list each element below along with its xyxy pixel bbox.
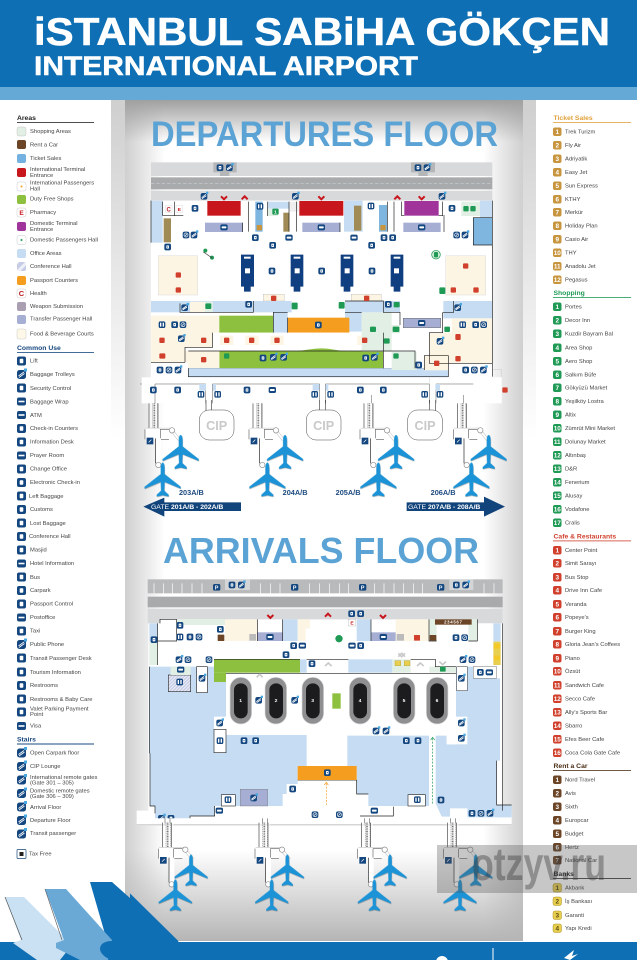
panel: list cafe and restaurants: Gloria Jean's Coffees bbox=[565, 642, 620, 648]
map: departures floor bbox=[140, 162, 508, 403]
panel: list banks: 4 bbox=[555, 926, 559, 933]
panel: list ticket sales: Sun Express bbox=[565, 184, 598, 190]
panel: list shopping: 11 bbox=[554, 439, 561, 446]
panel: list cafe and restaurants: Ally's Sports Bar bbox=[565, 710, 607, 716]
panel: list cafe and restaurants: 2 bbox=[555, 561, 559, 568]
bottom corner wedge bbox=[130, 893, 178, 943]
panel: list cafe and restaurants: Veranda bbox=[565, 602, 587, 608]
panel: list ticket sales: Easy Jet bbox=[565, 170, 588, 176]
panel: legend stairs: Open Carpark floor bbox=[30, 750, 79, 756]
panel: list cafe and restaurants: 9 bbox=[555, 656, 559, 663]
baggage carousels: 6 bbox=[436, 698, 439, 704]
panel: legend common use: Public Phone bbox=[30, 642, 64, 648]
panel: legend areas: Conference Hall bbox=[30, 264, 72, 270]
panel: legend common use bbox=[17, 345, 94, 730]
panel: legend common use: Bus bbox=[30, 575, 40, 581]
panel: list ticket sales: Fly Air bbox=[565, 143, 581, 149]
panel: list cafe and restaurants: 6 bbox=[555, 615, 559, 622]
panel: list shopping: 8 bbox=[555, 399, 559, 406]
panel: list shopping: 2 bbox=[555, 318, 559, 325]
baggage carousels: 3 bbox=[311, 698, 314, 704]
heading: departures floor: DEPARTURES FLOOR bbox=[151, 115, 498, 154]
panel: list shopping bbox=[553, 290, 631, 527]
panel: legend common use: Lost Baggage bbox=[30, 521, 66, 527]
panel: list shopping: 5 bbox=[555, 359, 559, 366]
panel: legend stairs: Tax Free bbox=[29, 852, 52, 858]
panel: legend common use: Valet Parking Payment bbox=[30, 706, 89, 712]
panel: legend stairs: CIP Lounge bbox=[30, 764, 61, 770]
panel: list rent a car: 6 bbox=[555, 845, 559, 852]
panel: legend stairs: Departure Floor bbox=[30, 818, 71, 824]
panel: list cafe and restaurants: Sbarro bbox=[565, 724, 582, 730]
panel: list ticket sales: Casio Air bbox=[565, 237, 588, 243]
panel: legend common use: Visa bbox=[30, 724, 42, 730]
panel: list ticket sales: 9 bbox=[555, 237, 559, 244]
panel: list banks: 2 bbox=[555, 899, 559, 906]
ticket and shop badges: 1 bbox=[274, 209, 277, 215]
panel: list ticket sales: 12 bbox=[554, 277, 561, 284]
panel: legend stairs: Transit passenger bbox=[30, 831, 76, 837]
panel: list ticket sales: THY bbox=[565, 250, 577, 256]
panel: list banks: Akbank bbox=[565, 886, 584, 892]
panel: list cafe and restaurants: 12 bbox=[554, 696, 561, 703]
panel: legend areas: International Passengers bbox=[30, 180, 94, 186]
panel: legend areas: Entrance bbox=[30, 173, 53, 179]
arrow: gate 207-208: GATE 207A/B - 208A/B bbox=[408, 504, 480, 511]
panel: list ticket sales: Adriyatik bbox=[565, 156, 587, 162]
panel: legend common use: Baggage Wrap bbox=[30, 400, 69, 406]
panel: list shopping: Decor Inn bbox=[565, 318, 590, 324]
panel: list shopping: D&R bbox=[565, 466, 577, 472]
panel: legend stairs: Domestic remote gates bbox=[30, 788, 90, 794]
panel: legend areas: Hall bbox=[30, 186, 40, 192]
panel: list shopping: Shopping bbox=[554, 290, 585, 297]
gate concourse bar bbox=[140, 369, 502, 403]
arrivals badges: E bbox=[350, 621, 354, 627]
airside: arrivals gates bbox=[130, 823, 512, 943]
panel: list ticket sales: Anadolu Jet bbox=[565, 264, 596, 270]
arrow: gate 201-202: GATE 201A/B - 202A/B bbox=[151, 504, 223, 511]
panel: list cafe and restaurants: 5 bbox=[555, 602, 559, 609]
panel: list cafe and restaurants: 10 bbox=[554, 669, 561, 676]
arrival bar shadow bbox=[137, 823, 512, 826]
arrivals road bands bbox=[148, 579, 503, 623]
panel: list cafe and restaurants: 7 bbox=[555, 629, 559, 636]
ticket and shop badges: C bbox=[167, 207, 172, 213]
panel: list shopping: 14 bbox=[554, 480, 561, 487]
panel: list shopping: 7 bbox=[555, 385, 559, 392]
panel: legend areas: Office Areas bbox=[30, 251, 62, 257]
CIP lounges: CIP bbox=[414, 419, 436, 433]
arrow: gate 201-202 bbox=[143, 498, 241, 517]
panel: legend stairs: Stairs bbox=[17, 736, 36, 744]
panel: list ticket sales: Holiday Plan bbox=[565, 224, 598, 230]
panel: legend common use: Common Use bbox=[17, 345, 61, 352]
gate numbers: 205A/B bbox=[336, 488, 361, 497]
panel: list cafe and restaurants: Center Point bbox=[565, 548, 598, 554]
panel: legend common use: Hotel Information bbox=[30, 561, 74, 567]
panel: list cafe and restaurants: Drive Inn Cafe bbox=[565, 588, 602, 594]
panel: legend stairs bbox=[17, 736, 97, 858]
baggage carousels: 1 bbox=[239, 698, 242, 704]
panel: list shopping: Portes bbox=[565, 304, 582, 310]
panel: legend areas: Health bbox=[30, 291, 47, 297]
panel: legend areas: Food & Beverage Courts bbox=[30, 332, 94, 338]
map: arrivals floor bbox=[137, 579, 512, 826]
gate numbers: 206A/B bbox=[431, 488, 456, 497]
panel: list ticket sales: 8 bbox=[555, 223, 559, 230]
panel: legend common use: Masjid bbox=[30, 548, 47, 554]
check-in island glyphs bbox=[244, 257, 400, 273]
footer band with tail fins bbox=[0, 882, 637, 960]
duty free and passport blocks bbox=[298, 693, 357, 780]
panel: legend common use: Tourism Information bbox=[30, 670, 81, 676]
panel: legend areas: Domestic Passengers Hall bbox=[30, 238, 98, 244]
panel: list ticket sales: Ticket Sales bbox=[554, 115, 593, 122]
panel: list ticket sales: 2 bbox=[555, 143, 559, 150]
panel: list shopping: 4 bbox=[555, 345, 559, 352]
panel: list shopping: Zümrüt Mini Market bbox=[565, 426, 615, 432]
panel: legend common use: Customs bbox=[30, 507, 53, 513]
panel: list ticket sales: 3 bbox=[555, 156, 559, 163]
panel: legend common use: Prayer Room bbox=[30, 453, 64, 459]
panel: list shopping: Altix bbox=[565, 412, 576, 418]
panel: legend areas bbox=[17, 115, 98, 339]
panel: list rent a car: Sixth bbox=[565, 804, 578, 810]
panel: list shopping: 17 bbox=[554, 520, 561, 527]
baggage carousels: 5 bbox=[403, 698, 406, 704]
panel: list cafe and restaurants: 15 bbox=[554, 737, 561, 744]
arrivals floor plate bbox=[137, 619, 512, 818]
arrival planes bbox=[159, 855, 492, 911]
gate numbers bbox=[179, 488, 456, 497]
panel: list ticket sales: 4 bbox=[555, 170, 559, 177]
panel: legend stairs: Arrival Floor bbox=[30, 805, 61, 811]
floor arrows bbox=[257, 614, 446, 805]
panel: list rent a car: Rent a Car bbox=[554, 763, 588, 770]
baggage carousels: 2 bbox=[275, 698, 278, 704]
arrivals zones bbox=[137, 619, 512, 818]
heading: arrivals floor: ARRIVALS FLOOR bbox=[163, 530, 479, 571]
walls bbox=[151, 201, 492, 377]
panel: list cafe and restaurants bbox=[553, 534, 631, 757]
panel: list ticket sales: Trek Turizm bbox=[565, 130, 596, 136]
panel: list cafe and restaurants: Sandwich Cafe bbox=[565, 683, 604, 689]
ticket and shop badges: E bbox=[178, 207, 182, 213]
arrivals badges bbox=[218, 619, 500, 672]
panel: list rent a car bbox=[553, 763, 631, 865]
panel: legend areas: Duty Free Shops bbox=[30, 196, 74, 202]
panel: list ticket sales: 1 bbox=[555, 129, 559, 136]
title: INTERNATIONAL AIRPORT bbox=[34, 51, 419, 81]
CIP lounges bbox=[199, 400, 442, 440]
panel: list banks: Yapı Kredi bbox=[565, 926, 592, 932]
panel: legend areas: Pharmacy bbox=[30, 210, 56, 216]
panel: list shopping: 15 bbox=[554, 493, 561, 500]
panel: legend areas: C bbox=[19, 289, 25, 298]
check-in islands bbox=[241, 255, 403, 292]
panel: legend common use: Point bbox=[30, 712, 44, 718]
panel: list cafe and restaurants: 1 bbox=[555, 548, 559, 555]
panel: list cafe and restaurants: Bus Stop bbox=[565, 575, 589, 581]
panel: list cafe and restaurants: Efes Beer Cafe bbox=[565, 737, 604, 743]
panel: legend common use: Carpark bbox=[30, 588, 51, 594]
panel: list rent a car: 4 bbox=[555, 818, 559, 825]
panel: list cafe and restaurants: 3 bbox=[555, 575, 559, 582]
panel: legend common use: Restrooms & Baby Care bbox=[30, 697, 93, 703]
planes bbox=[145, 435, 507, 497]
panel: legend areas: International Terminal bbox=[30, 167, 85, 173]
pier bridges bbox=[145, 403, 488, 468]
panel: list cafe and restaurants: 11 bbox=[554, 683, 561, 690]
CIP lounges: CIP bbox=[206, 419, 228, 433]
panel: list banks: Garanti bbox=[565, 913, 584, 919]
panel: list shopping: 10 bbox=[554, 426, 561, 433]
panel: list cafe and restaurants: 14 bbox=[554, 723, 561, 730]
panel: list rent a car: Budget bbox=[565, 832, 584, 838]
baggage carousels bbox=[230, 677, 448, 724]
panel: list shopping: Fenerium bbox=[565, 480, 590, 486]
panel: list shopping: Alusay bbox=[565, 494, 583, 500]
panel: legend common use: Electronic Check-in bbox=[30, 480, 80, 486]
panel: list rent a car: National Car bbox=[565, 858, 597, 864]
title bbox=[34, 11, 610, 81]
panel: list shopping: 13 bbox=[554, 466, 561, 473]
panel: list shopping: 1 bbox=[555, 304, 559, 311]
panel: list cafe and restaurants: Secco Cafe bbox=[565, 696, 595, 702]
panel: legend common use: Left Baggage bbox=[29, 494, 64, 500]
panel: legend common use: Transit Passenger Desk bbox=[30, 656, 92, 662]
ticket and shop badges bbox=[159, 206, 508, 393]
panel: list ticket sales: 6 bbox=[555, 197, 559, 204]
panel: list cafe and restaurants: Burger King bbox=[565, 629, 596, 635]
panel: list rent a car: Avis bbox=[565, 791, 576, 797]
panel: legend common use: ATM bbox=[30, 413, 42, 419]
arrivals badges: 234567 bbox=[444, 620, 463, 625]
panel: legend stairs: (Gate 306 – 309) bbox=[30, 794, 74, 800]
panel: list rent a car: 5 bbox=[555, 831, 559, 838]
panel: legend areas: Shopping Areas bbox=[30, 129, 71, 135]
panel: list shopping: Gökyüzü Market bbox=[565, 386, 608, 392]
panel: list rent a car: 2 bbox=[555, 791, 559, 798]
panel: list ticket sales: Pegasus bbox=[565, 278, 588, 284]
panel: list cafe and restaurants: Cafe & Restaurants bbox=[554, 534, 616, 540]
panel: list ticket sales: Merkür bbox=[565, 210, 583, 216]
panel: list banks: 3 bbox=[555, 913, 559, 920]
panel: list rent a car: 7 bbox=[555, 858, 559, 865]
header banner bbox=[0, 0, 637, 100]
panel: list ticket sales: 10 bbox=[554, 250, 561, 257]
panel: list shopping: Area Shop bbox=[565, 346, 592, 352]
panel: list cafe and restaurants: 4 bbox=[555, 588, 559, 595]
panel: list rent a car: Hertz bbox=[565, 845, 579, 851]
panel: legend common use: Postoffice bbox=[30, 615, 55, 621]
panel: legend common use: Restrooms bbox=[30, 683, 58, 689]
panel: legend areas: Weapon Submission bbox=[30, 304, 83, 310]
zones bbox=[151, 201, 493, 377]
panel: list cafe and restaurants: 13 bbox=[554, 710, 561, 717]
panel: legend areas: Ticket Sales bbox=[30, 156, 61, 162]
panel: list cafe and restaurants: Özsüt bbox=[565, 668, 581, 675]
panel: list banks: Banks bbox=[554, 871, 574, 878]
panel: list cafe and restaurants: 16 bbox=[554, 750, 561, 757]
panel: legend areas: Entrance bbox=[30, 227, 53, 233]
panel: list shopping: 12 bbox=[554, 453, 561, 460]
panel: list ticket sales: 7 bbox=[555, 210, 559, 217]
panel: list rent a car: Europcar bbox=[565, 818, 589, 824]
panel: list shopping: Altınbaş bbox=[565, 453, 586, 459]
panel: legend common use: Check-in Counters bbox=[30, 426, 78, 432]
gate bar outline bbox=[137, 818, 512, 826]
panel: legend common use: Conference Hall bbox=[29, 534, 71, 540]
panel: legend areas: E bbox=[19, 210, 24, 217]
panel: list rent a car: 3 bbox=[555, 804, 559, 811]
panel: list shopping: Cralis bbox=[565, 520, 580, 526]
panel: legend common use: Security Control bbox=[30, 386, 71, 392]
panel: legend areas: Passport Counters bbox=[30, 278, 78, 284]
panel: legend stairs: International remote gates bbox=[30, 775, 97, 781]
panel: list shopping: Kuzdir Bayram Bal bbox=[565, 332, 613, 338]
panel: list shopping: Aero Shop bbox=[565, 359, 592, 365]
panel: legend common use: Change Office bbox=[30, 466, 67, 472]
panel: list cafe and restaurants: Simit Sarayı bbox=[565, 561, 597, 567]
panel: legend areas: Rent a Car bbox=[30, 142, 58, 148]
panel: legend areas: Transfer Passenger Hall bbox=[30, 316, 92, 322]
panel: list cafe and restaurants: 8 bbox=[555, 642, 559, 649]
panel: list banks: İş Bankası bbox=[565, 898, 592, 905]
gate numbers: 204A/B bbox=[283, 488, 308, 497]
service icons bbox=[157, 163, 488, 373]
panel: list shopping: 6 bbox=[555, 372, 559, 379]
panel: legend common use: Passport Control bbox=[30, 602, 73, 608]
terminal floor plate bbox=[151, 201, 492, 377]
panel: list cafe and restaurants: Popeye's bbox=[565, 615, 589, 621]
arrival piers bbox=[158, 823, 478, 887]
panel: list ticket sales: KTHY bbox=[565, 197, 581, 203]
panel: legend common use: Baggage Trolleys bbox=[30, 372, 75, 378]
panel: list cafe and restaurants: Coca Cola Gate Cafe bbox=[565, 750, 620, 756]
gate numbers: 203A/B bbox=[179, 488, 204, 497]
panel: legend stairs: (Gate 301 – 305) bbox=[30, 780, 74, 786]
panel: list shopping: Dolunay Market bbox=[565, 440, 606, 446]
panel: legend common use: Lift bbox=[30, 358, 38, 364]
panel: list shopping: Salkım Büfe bbox=[565, 372, 596, 378]
arrow: gate 207-208 bbox=[407, 497, 505, 517]
panel: list shopping: Vodafone bbox=[565, 507, 590, 513]
panel: legend areas: Areas bbox=[17, 115, 36, 122]
panel: list banks bbox=[553, 871, 631, 933]
airside: departures gates bbox=[143, 400, 507, 517]
panel: list ticket sales: 5 bbox=[555, 183, 559, 190]
CIP lounges: CIP bbox=[313, 419, 335, 433]
panel: legend areas: Domestic Terminal bbox=[30, 221, 78, 227]
chevrons bbox=[221, 196, 425, 199]
panel: list shopping: 16 bbox=[554, 507, 561, 514]
road bands bbox=[151, 162, 492, 201]
arrivals walls bbox=[149, 619, 512, 818]
panel: list ticket sales: 11 bbox=[554, 264, 561, 271]
title: iSTANBUL SABiHA GÖKÇEN bbox=[34, 11, 610, 54]
panel: list ticket sales bbox=[553, 115, 631, 284]
panel: list shopping: Yeşilköy Lostra bbox=[565, 399, 605, 405]
panel: list cafe and restaurants: Piano bbox=[565, 656, 580, 662]
panel: legend common use: Information Desk bbox=[30, 440, 74, 446]
panel: legend common use: Taxi bbox=[30, 628, 40, 634]
panel: list rent a car: Nord Travel bbox=[565, 778, 595, 784]
panel: list rent a car: 1 bbox=[555, 777, 559, 784]
baggage carousels: 4 bbox=[359, 698, 362, 704]
arrivals service icons bbox=[151, 580, 494, 822]
panel: list shopping: 9 bbox=[555, 412, 559, 419]
panel: list banks: 1 bbox=[555, 885, 559, 892]
panel: list shopping: 3 bbox=[555, 331, 559, 338]
